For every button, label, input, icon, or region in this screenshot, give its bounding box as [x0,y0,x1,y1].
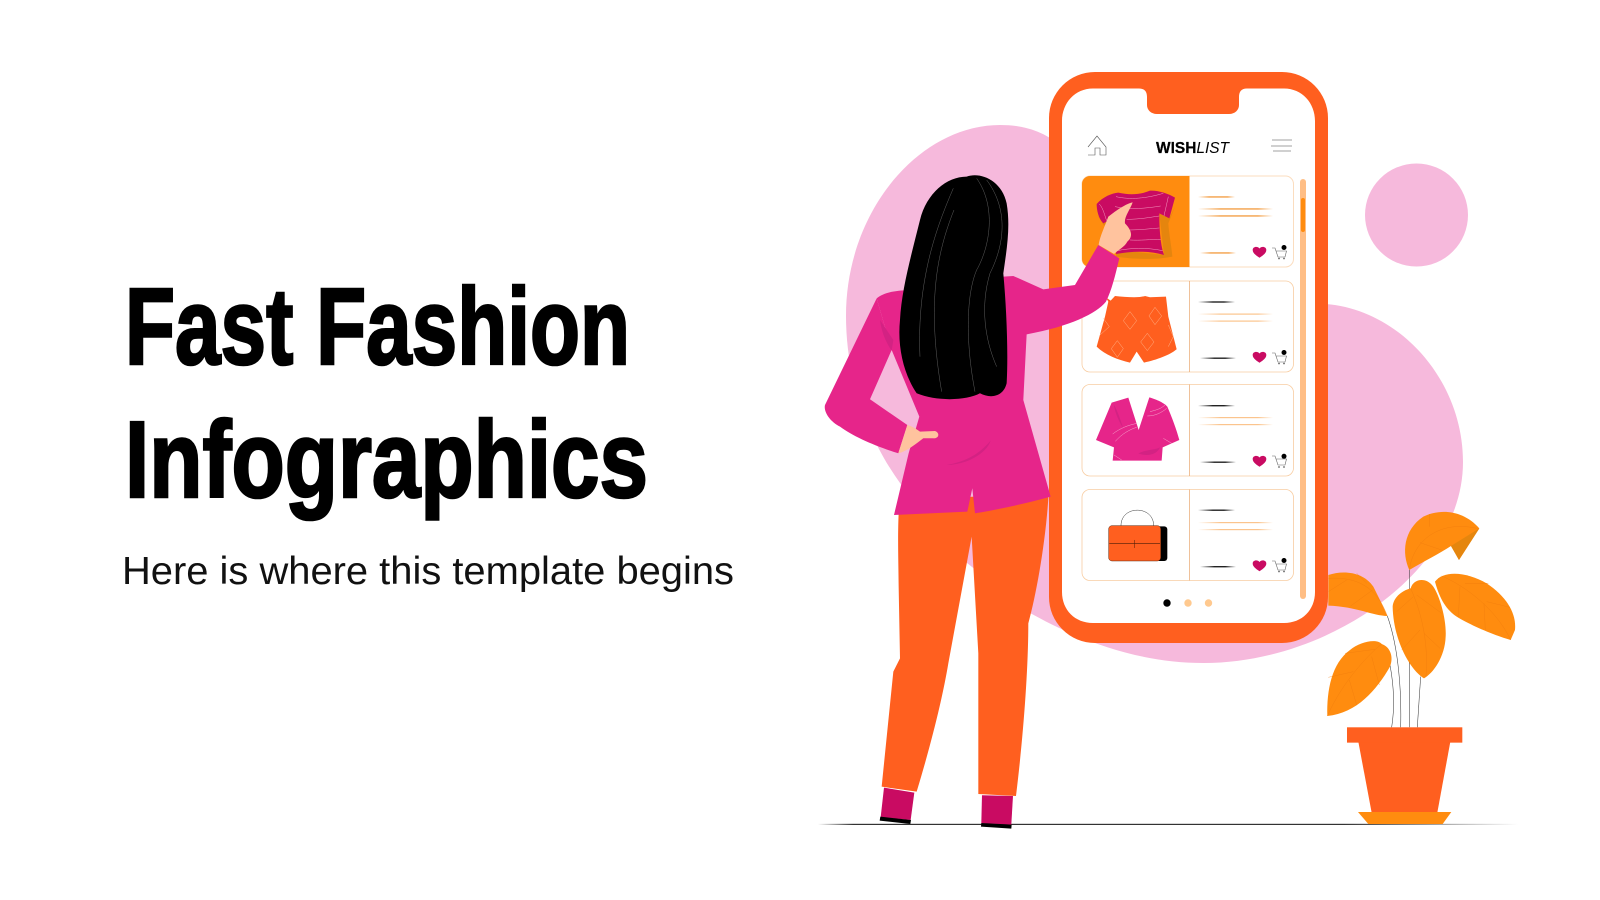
title: Fast Fashion [125,266,630,388]
potted plant [1327,512,1515,824]
phone [1049,72,1328,643]
saucer [1358,812,1451,824]
jacket [825,245,1119,515]
subtitle: Here is where this template begins [122,550,734,593]
leaf veins [1327,514,1511,716]
icon: home [1088,136,1106,155]
title [125,266,648,521]
pink background blob [846,125,1463,663]
title: Infographics [125,399,648,521]
hair [899,175,1008,399]
phone body [1049,72,1328,643]
stems [1387,570,1421,727]
card 2: shorts [1082,281,1294,372]
card 4: handbag [1082,490,1294,580]
pagination dots [1163,599,1212,607]
phone screen [1062,88,1315,623]
shoes [880,788,1013,829]
ground line [818,824,1518,825]
pointing hand [1099,202,1133,257]
hip hand [898,425,938,453]
woman [825,175,1133,829]
pink circle [1365,164,1468,266]
leaves [1327,512,1515,716]
card 1: t-shirt [1082,176,1294,267]
icon: menu [1271,140,1292,151]
card 3: blouse [1082,384,1294,476]
pot [1358,740,1451,813]
scrollbar [1300,179,1306,599]
trousers [882,493,1049,796]
wishlist heading: WISHLIST [1156,140,1231,157]
